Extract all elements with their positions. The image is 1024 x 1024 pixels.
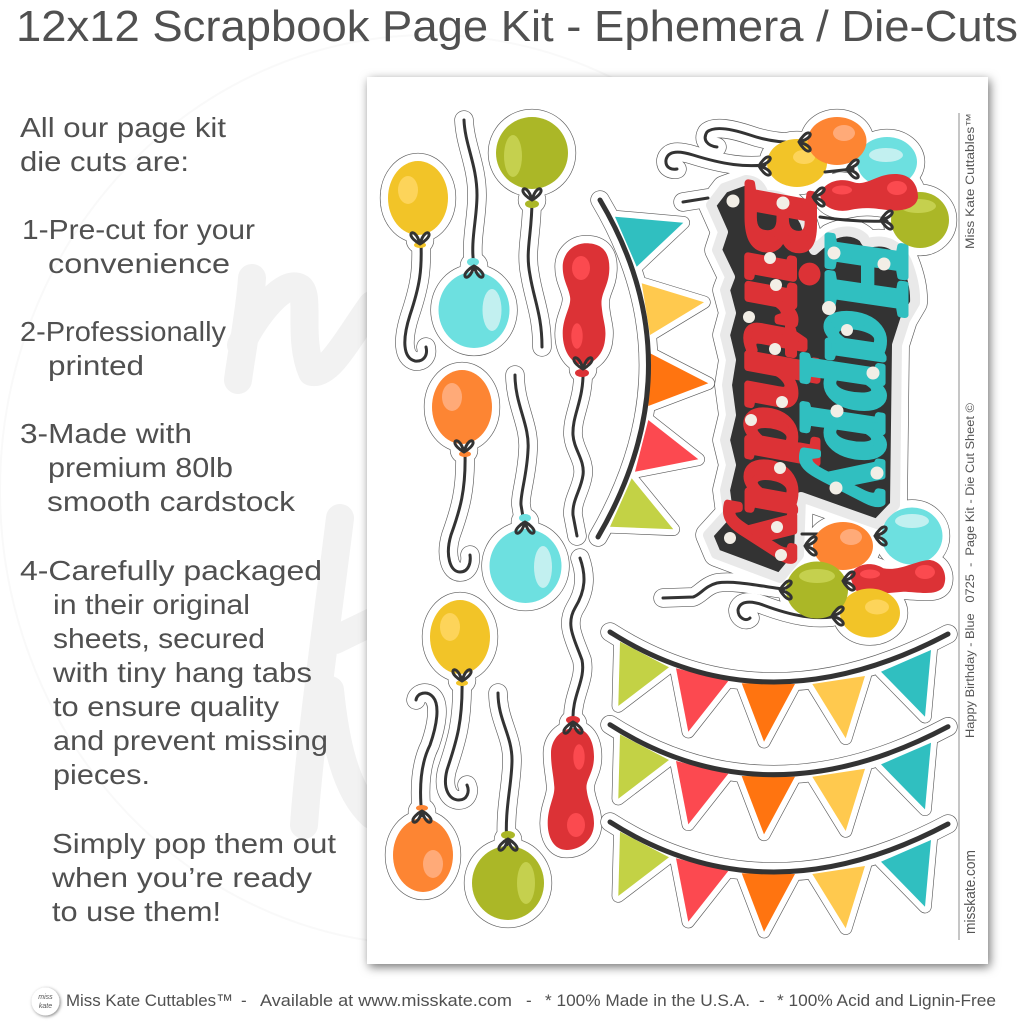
text block: die cut features: smooth cardstock — [47, 486, 296, 517]
title: 12x12 Scrapbook Page Kit - Ephemera / Die-Cuts — [16, 2, 1018, 51]
sheet label: website: misskate.com — [962, 850, 979, 934]
banner: garland 3 — [610, 822, 948, 932]
balloon: teal middle — [490, 375, 562, 603]
banner: vertical pennant — [598, 200, 708, 537]
top balloon cluster — [666, 117, 949, 248]
footer: * 100% Made in the U.S.A. — [545, 991, 750, 1010]
footer: - — [526, 991, 532, 1010]
footer: * 100% Acid and Lignin-Free — [777, 991, 996, 1010]
text block: die cut features: to use them! — [52, 896, 221, 927]
word: Birthday: Birthday — [726, 183, 837, 561]
text block: die cut features: 3-Made with — [20, 418, 192, 449]
text block: die cut features: 2-Professionally — [20, 316, 226, 347]
text block: die cut features: 4-Carefully packaged — [20, 555, 322, 586]
text block: die cut features: when you’re ready — [51, 862, 312, 893]
text block: die cut features: printed — [48, 350, 144, 381]
text block: die cut features: die cuts are: — [20, 146, 189, 177]
text block: die cut features — [20, 112, 336, 927]
balloon: orange middle — [432, 370, 492, 572]
footer: Miss Kate Cuttables™ — [66, 991, 233, 1010]
text block: die cut features: sheets, secured — [53, 623, 265, 654]
balloon: red long lower — [548, 558, 594, 850]
bottom balloon cluster — [663, 508, 945, 638]
text block: die cut features: to ensure quality — [53, 691, 279, 722]
footer: Available at www.misskate.com — [260, 991, 512, 1010]
footer: - — [759, 991, 765, 1010]
die cut: Happy Birthday title with balloons — [663, 117, 949, 638]
text block: die cut features: in their original — [53, 589, 250, 620]
word: Happy: Happy — [802, 235, 933, 505]
sheet label: brand: Miss Kate Cuttables™ — [965, 113, 977, 249]
footer — [66, 991, 996, 1010]
balloon: green top — [496, 117, 568, 347]
footer: - — [241, 991, 247, 1010]
icon: Miss Kate logo: miss — [38, 994, 53, 1001]
background watermark — [0, 35, 860, 945]
text block: die cut features: Simply pop them out — [52, 828, 336, 859]
balloon: yellow top left — [388, 161, 448, 361]
text block: die cut features: pieces. — [53, 759, 150, 790]
balloon: green lower — [472, 693, 544, 920]
balloon: teal top — [438, 120, 510, 348]
sheet label: product: Happy Birthday - Blue 0725 - Page Kit - Die Cut Sheet © — [965, 402, 977, 738]
balloon: orange lower — [393, 693, 453, 892]
text block: die cut features: with tiny hang tabs — [52, 657, 312, 688]
text block: die cut features: 1-Pre-cut for your — [22, 214, 255, 245]
balloon: yellow lower — [430, 600, 490, 800]
text block: die cut features: premium 80lb — [48, 452, 233, 483]
panel: die cut sheet — [367, 77, 988, 964]
icon: Miss Kate logo — [32, 988, 60, 1016]
banner: garland 1 — [610, 632, 948, 742]
text block: die cut features: and prevent missing — [53, 725, 328, 756]
icon: Miss Kate logo: kate — [39, 1003, 52, 1010]
balloon: red long top — [563, 243, 609, 536]
banner: garland 2 — [610, 725, 948, 834]
text block: die cut features: All our page kit — [20, 112, 226, 143]
text block: die cut features: convenience — [48, 248, 230, 279]
